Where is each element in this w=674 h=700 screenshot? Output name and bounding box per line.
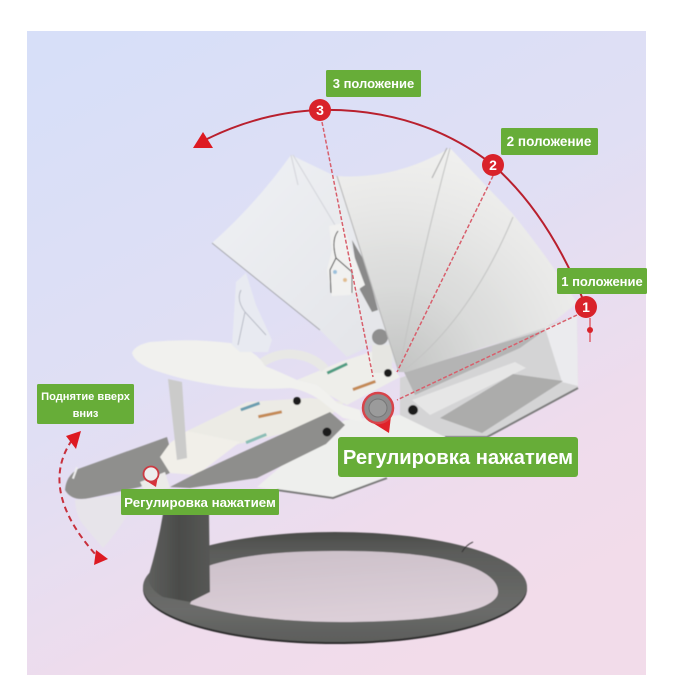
label: press adjustment main <box>338 437 578 477</box>
marker 1: 1 <box>582 299 590 315</box>
lowered footrest ghost <box>75 495 127 548</box>
seat print fabric front <box>187 398 345 446</box>
label: lift up and down <box>37 384 134 424</box>
swing chair illustration <box>65 148 578 644</box>
label: 2 position: 2 положение <box>507 134 592 149</box>
label: 3 position <box>326 70 421 97</box>
footrest <box>65 437 176 499</box>
position guide lines <box>322 122 577 400</box>
marker: press adjustment main <box>363 393 393 433</box>
label: lift up and down: вниз <box>73 408 99 420</box>
label: lift up and down: Поднятие вверх <box>41 391 131 403</box>
marker 2: 2 <box>489 157 497 173</box>
base ring <box>143 532 527 644</box>
seat underside <box>257 415 445 498</box>
label: 3 position: 3 положение <box>333 76 414 91</box>
label: 1 position <box>557 268 647 294</box>
fabric print <box>240 362 376 444</box>
canopy ribs <box>337 148 513 372</box>
toy: giraffe large <box>327 223 365 296</box>
canopy position 2 <box>337 148 577 372</box>
tray <box>132 340 363 422</box>
label: press adjustment main: Регулировка нажатием <box>343 447 573 469</box>
toy: giraffe faded <box>232 273 272 352</box>
marker 3: 3 <box>316 102 324 118</box>
tray pole <box>168 379 187 460</box>
adjustment arc arrow <box>193 110 586 307</box>
seat print fabric rear <box>297 350 400 405</box>
canopy centre mechanics <box>352 240 392 373</box>
basket mesh <box>400 315 578 437</box>
seat front pad <box>160 431 240 475</box>
label: press adjustment footrest <box>121 489 279 515</box>
label: press adjustment footrest: Регулировка нажатием <box>124 495 276 510</box>
seat side bar <box>170 412 345 488</box>
footrest clip <box>140 472 170 492</box>
tray arm <box>258 354 325 369</box>
label: 1 position: 1 положение <box>561 274 643 289</box>
seat buttons <box>293 369 418 436</box>
footrest dashed arrow <box>59 431 108 565</box>
base stem <box>148 514 210 602</box>
marker 1 <box>575 296 597 342</box>
marker 2 <box>482 154 504 176</box>
canopy position 3 <box>212 155 400 368</box>
label: 2 position <box>501 128 598 155</box>
marker: press adjustment footrest <box>144 466 158 487</box>
marker 3 <box>309 99 331 121</box>
canopy rib <box>291 155 335 225</box>
